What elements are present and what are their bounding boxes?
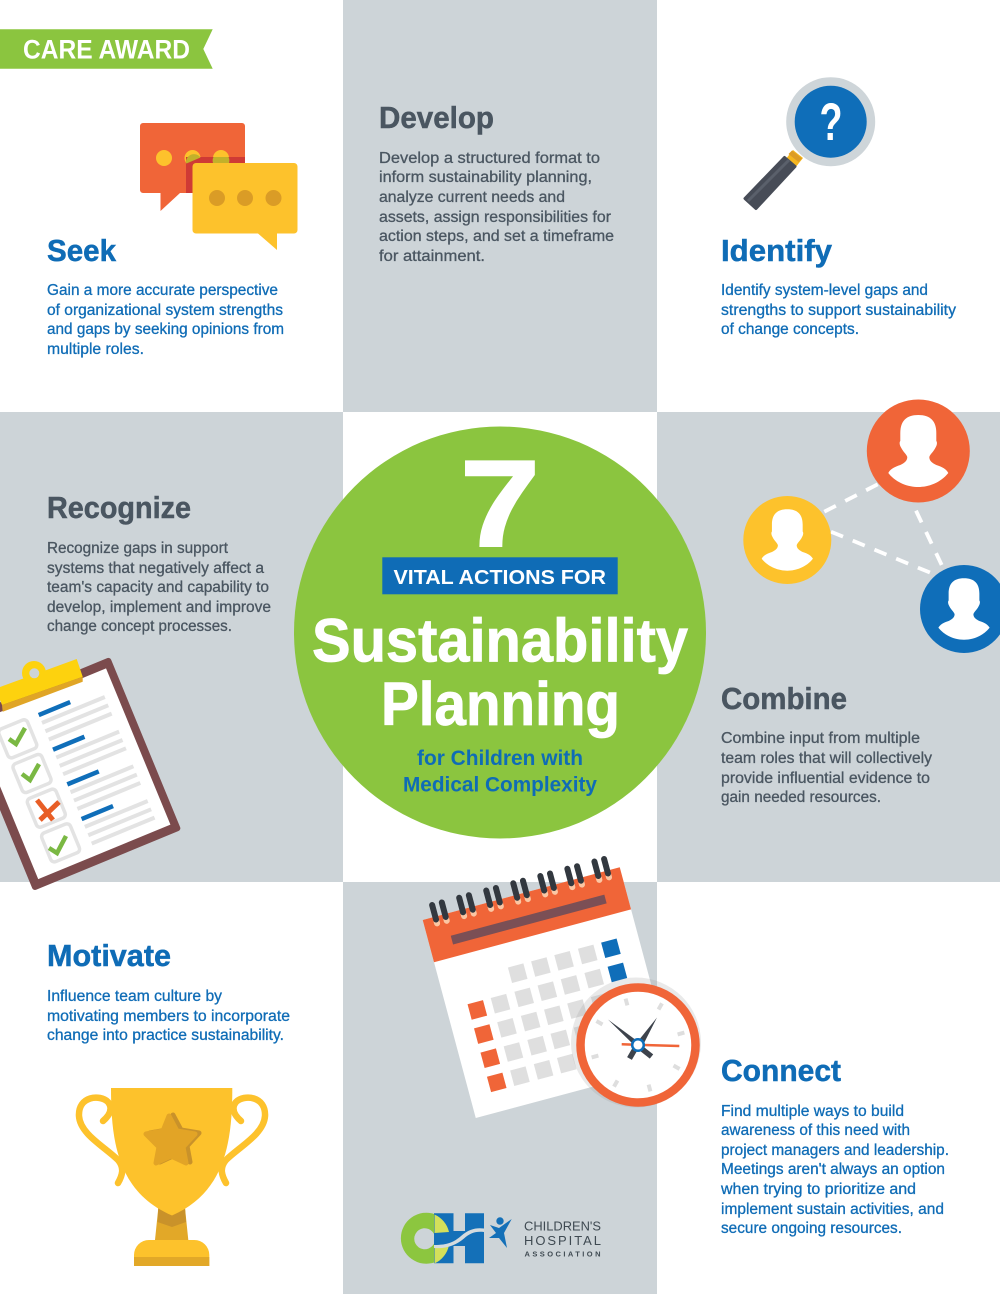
subtitle: for Children with Medical Complexity: Medical Complexity	[403, 774, 597, 797]
text block: Connect description: implement sustain activities, and	[721, 1201, 944, 1218]
heading: Motivate: Motivate	[47, 939, 171, 973]
text block: Identify description: Identify system-level gaps and	[721, 282, 928, 299]
heading: Combine: Combine	[721, 682, 847, 716]
icon: connected people network	[743, 400, 1000, 653]
text block: Connect description: project managers and leadership.	[721, 1142, 949, 1159]
logo: Children's Hospital Association: ASSOCIATION	[524, 1250, 600, 1259]
text block: Connect description: awareness of this need with	[721, 1122, 910, 1139]
text block: Recognize description: Recognize gaps in support	[47, 540, 229, 557]
subtitle: for Children with Medical Complexity: for Children with	[417, 747, 583, 770]
heading: Develop: Develop	[379, 101, 494, 135]
text block: Identify description: strengths to support sustainability	[721, 302, 956, 319]
panel: Motivate	[47, 939, 290, 1266]
text block: Recognize description: team's capacity and capability to	[47, 579, 269, 596]
heading: Connect: Connect	[721, 1054, 841, 1088]
text block: Seek description: of organizational system strengths	[47, 302, 283, 319]
text block: Develop description: for attainment.	[379, 248, 485, 265]
text block: Recognize description	[47, 540, 271, 635]
subtitle: for Children with Medical Complexity	[403, 747, 597, 797]
text block: Connect description: Meetings aren't always an option	[721, 1161, 945, 1178]
text block: Connect description: secure ongoing resources.	[721, 1220, 902, 1237]
text block: Develop description: inform sustainability planning,	[379, 169, 592, 186]
panel: Develop	[343, 0, 657, 412]
title: Sustainability Planning: Planning	[381, 670, 620, 738]
icon: magnifying glass	[745, 77, 875, 208]
icon: magnifying glass: ?	[820, 93, 842, 152]
text block: Connect description: Find multiple ways to build	[721, 1103, 904, 1120]
text block: Develop description	[379, 150, 614, 265]
banner: Care Award: CARE AWARD	[23, 35, 190, 65]
title: Sustainability Planning: Sustainability	[312, 607, 688, 675]
text block: Motivate description: motivating members to incorporate	[47, 1008, 290, 1025]
text block: Identify description: of change concepts.	[721, 321, 859, 338]
icon: calendar and clock	[420, 856, 701, 1118]
text block: Connect description: when trying to prioritize and	[720, 1181, 916, 1198]
text block: Combine description: Combine input from multiple	[721, 730, 920, 747]
logo: Children's Hospital Association: CHILDREN'S	[524, 1219, 601, 1234]
text block: Develop description: analyze current needs and	[379, 189, 565, 206]
panel: Combine	[657, 400, 1000, 882]
banner: Care Award	[0, 29, 213, 69]
icon: speech bubbles	[140, 123, 298, 250]
heading: Identify: Identify	[721, 234, 832, 268]
text block: Motivate description	[47, 988, 290, 1044]
text block: Develop description: action steps, and set a timeframe	[379, 228, 614, 245]
logo: Children's Hospital Association: HOSPITAL	[524, 1233, 601, 1248]
label: vital actions for: VITAL ACTIONS FOR	[394, 566, 606, 589]
panel: bottom centre	[343, 856, 701, 1294]
panel: Identify	[721, 77, 956, 338]
icon: trophy	[79, 1088, 265, 1266]
text block: Develop description: Develop a structured format to	[379, 150, 600, 167]
text block: Motivate description: Influence team culture by	[47, 988, 222, 1005]
text block: Combine description: provide influential evidence to	[721, 770, 930, 787]
text block: Combine description: team roles that will collectively	[721, 750, 932, 767]
text block: Recognize description: systems that negatively affect a	[47, 560, 264, 577]
text block: Seek description: Gain a more accurate perspective	[47, 282, 278, 299]
label: vital actions for	[382, 557, 618, 594]
text block: Connect description	[720, 1103, 949, 1237]
text block: Seek description: multiple roles.	[47, 341, 144, 358]
text block: Seek description	[47, 282, 284, 358]
heading: Recognize: Recognize	[47, 491, 191, 525]
heading: Seek: Seek	[47, 234, 116, 268]
text block: Seek description: and gaps by seeking opinions from	[47, 321, 284, 338]
logo: Children's Hospital Association	[401, 1213, 601, 1264]
icon: clipboard checklist	[0, 657, 181, 891]
text block: Recognize description: develop, implement and improve	[47, 599, 271, 616]
title: Sustainability Planning	[312, 607, 688, 738]
panel: Connect	[720, 1054, 949, 1237]
text block: Motivate description: change into practice sustainability.	[47, 1027, 284, 1044]
big number 7: 7	[460, 436, 540, 573]
panel: Seek	[47, 123, 298, 358]
text block: Recognize description: change concept processes.	[47, 618, 232, 635]
text block: Identify description	[721, 282, 956, 338]
central title badge	[294, 426, 706, 838]
text block: Combine description	[721, 730, 932, 806]
panel: Recognize	[0, 412, 343, 891]
text block: Combine description: gain needed resources.	[721, 789, 881, 806]
text block: Develop description: assets, assign responsibilities for	[379, 209, 611, 226]
